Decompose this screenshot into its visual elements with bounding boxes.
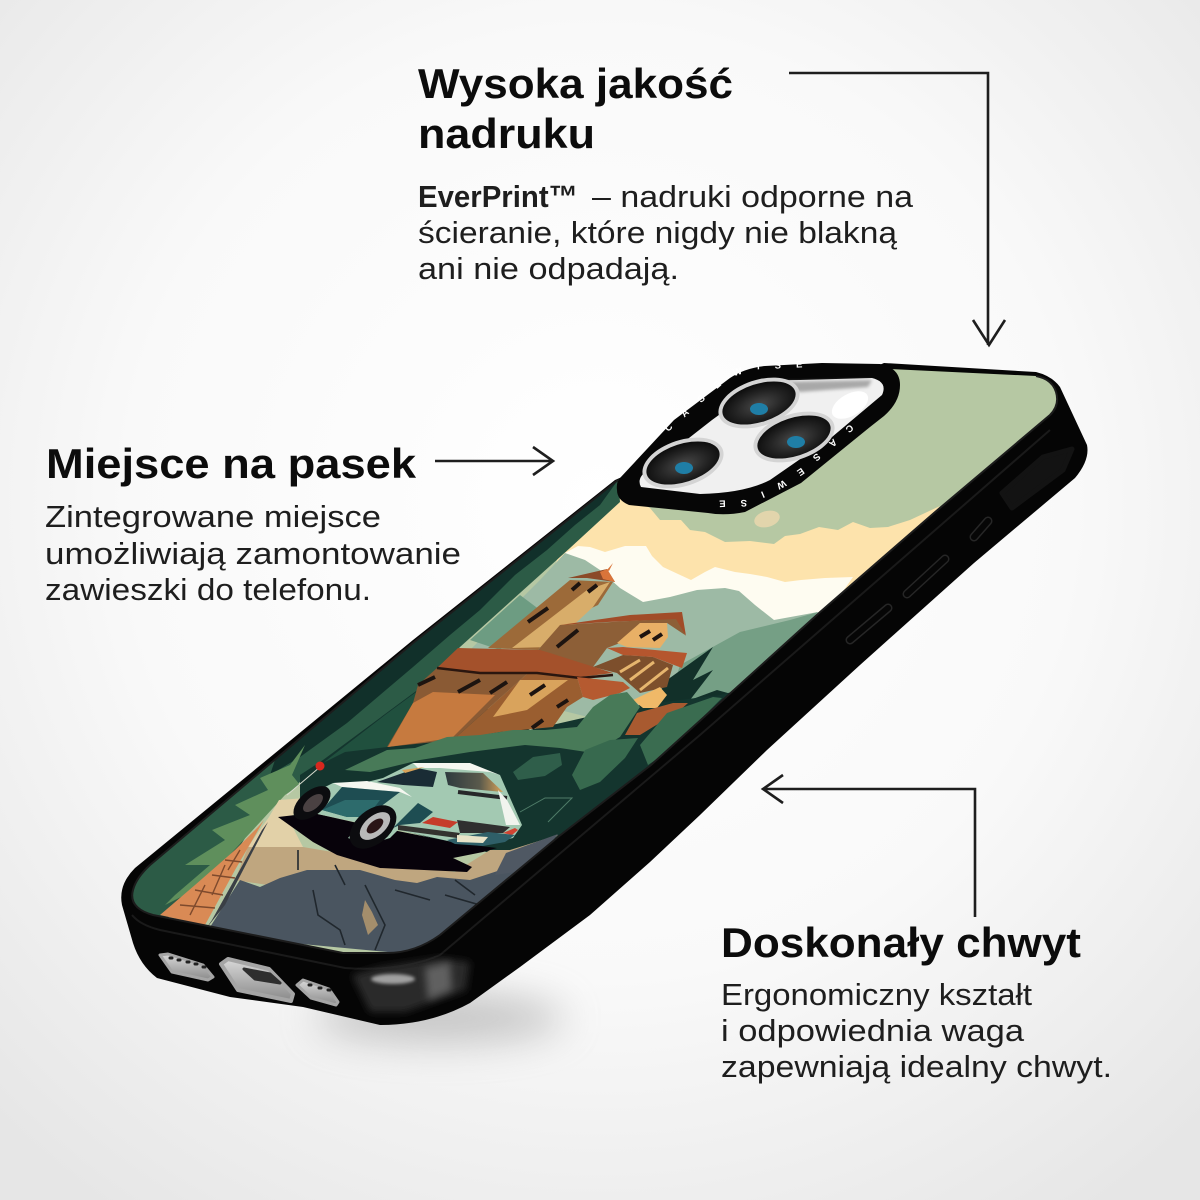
dark left hill	[120, 478, 620, 940]
road tan stain	[362, 900, 378, 935]
side button two inner	[907, 559, 945, 594]
lighter slope under band	[324, 692, 416, 762]
front wheel	[287, 780, 337, 826]
case body	[121, 363, 1088, 1025]
small lit building	[633, 687, 667, 708]
description: print quality: ścieranie, które nigdy nie blakną	[418, 215, 898, 250]
heading: print quality: nadruku	[418, 110, 595, 157]
gloss panel	[425, 962, 452, 1000]
car shadow	[278, 813, 497, 872]
tower lit side	[512, 582, 610, 648]
round shrub large	[572, 738, 638, 790]
strap slot	[1002, 449, 1072, 508]
description: grip: i odpowiednia waga	[721, 1013, 1025, 1048]
brick wall	[160, 820, 264, 925]
round shrub small	[513, 753, 562, 780]
car body	[295, 763, 522, 845]
licence plate	[457, 835, 488, 843]
upper wing roof	[560, 612, 686, 636]
side button one inner	[850, 608, 888, 640]
side button three inner	[974, 521, 988, 537]
charging port opening	[244, 969, 280, 983]
description: print quality: EverPrint™	[418, 179, 578, 214]
description: strap slot: zawieszki do telefonu.	[45, 572, 371, 607]
lower right building	[625, 703, 688, 735]
bumper	[398, 825, 460, 838]
white cloud	[565, 546, 853, 620]
road sign	[316, 762, 324, 770]
heading: grip: Doskonały chwyt	[721, 919, 1081, 966]
camera glass	[640, 378, 884, 494]
rear panel highlight	[498, 790, 520, 825]
charging port	[221, 959, 293, 1001]
brand text bottom: CASEWISE	[720, 425, 853, 508]
pavement light	[248, 798, 306, 847]
rear window	[445, 772, 503, 792]
camera glass shadow	[775, 380, 872, 392]
description: grip: zapewniają idealny chwyt.	[721, 1049, 1112, 1084]
road sign pole	[287, 767, 320, 795]
text block: print quality	[418, 60, 914, 286]
heading: strap slot: Miejsce na pasek	[46, 440, 417, 487]
camera island	[616, 363, 900, 514]
rear wheel	[341, 797, 405, 857]
arrow: strap slot	[435, 447, 553, 475]
right edge shrub strip	[640, 697, 722, 765]
brick mortar	[180, 850, 242, 915]
bumper teal	[447, 832, 515, 846]
middle wall lit patch	[493, 680, 568, 717]
arrow: grip	[763, 775, 975, 917]
car	[287, 763, 522, 857]
speaker left	[160, 954, 213, 980]
light foliage	[165, 745, 305, 905]
lens top	[712, 368, 806, 438]
kerb	[205, 822, 268, 930]
description: strap slot	[45, 499, 461, 607]
lens left	[636, 428, 730, 498]
parking outline	[520, 798, 572, 822]
tower	[488, 580, 613, 650]
arrow: print quality	[789, 73, 1005, 345]
road cracks	[298, 850, 490, 950]
gloss highlight	[371, 974, 415, 984]
heading: print quality	[418, 60, 733, 157]
tail light left	[422, 817, 458, 828]
dark forest streak	[270, 480, 618, 775]
tower roof tip	[600, 563, 615, 582]
artwork rim	[132, 376, 1057, 953]
road gray right patch	[495, 834, 558, 875]
long roof	[437, 648, 613, 677]
sun	[754, 510, 780, 528]
sky	[168, 369, 1056, 952]
description: grip	[721, 977, 1112, 1084]
middle wall	[453, 673, 583, 740]
brand text top: CASEWISE	[666, 364, 802, 431]
arcade	[593, 655, 673, 693]
bushes in front of building	[345, 692, 640, 772]
rear dark panel	[457, 820, 510, 833]
rear wheel hub	[364, 816, 386, 836]
roof eave shadow	[437, 668, 613, 678]
arcade arches	[620, 660, 668, 690]
green foothills	[678, 612, 818, 698]
tail light right	[503, 828, 518, 835]
side button two	[907, 559, 945, 594]
dark garden	[300, 691, 730, 852]
upper wing wall	[538, 618, 685, 667]
heading: print quality: Wysoka jakość	[418, 60, 733, 107]
front wheel rim	[300, 791, 326, 815]
roof and hood highlight	[333, 763, 500, 797]
cypress trees	[661, 647, 728, 702]
back artwork	[120, 360, 1080, 960]
main wall orange	[388, 692, 495, 747]
description: strap slot: umożliwiają zamontowanie	[45, 536, 461, 571]
gloss base	[352, 958, 470, 1012]
hood	[322, 787, 400, 817]
side window	[377, 768, 437, 787]
windows	[418, 583, 662, 728]
phone in case	[121, 363, 1088, 1025]
yellow cloud	[556, 498, 940, 590]
small front roof	[577, 677, 630, 700]
hood light facet	[322, 800, 380, 817]
lower fender	[393, 803, 433, 828]
road gray	[205, 835, 560, 955]
wing lit end wall	[617, 623, 668, 648]
engine grille	[458, 792, 507, 798]
case bottom gloss	[352, 958, 470, 1012]
case ridge line	[132, 430, 1050, 969]
speaker right	[297, 980, 338, 1005]
second right roof	[607, 647, 687, 668]
rear wheel rim	[355, 807, 395, 845]
flash	[827, 385, 873, 425]
description: strap slot: Zintegrowane miejsce	[45, 499, 381, 534]
description: print quality: – nadruki odporne na	[592, 179, 914, 214]
side button three	[974, 521, 988, 537]
main wall shade	[387, 668, 528, 747]
lens right	[747, 402, 841, 472]
camera frame	[617, 363, 900, 514]
far mountains	[472, 553, 818, 716]
text block: strap slot	[45, 440, 461, 607]
side window amber	[402, 767, 425, 773]
road tan	[235, 835, 558, 920]
description: print quality: ani nie odpadają.	[418, 251, 679, 286]
description: print quality	[418, 179, 914, 286]
phone drop shadow	[315, 994, 565, 1042]
left green slope	[470, 595, 540, 650]
text block: grip	[721, 919, 1112, 1084]
description: grip: Ergonomiczny kształt	[721, 977, 1032, 1012]
tower roof	[568, 569, 615, 582]
side button one	[850, 608, 888, 640]
